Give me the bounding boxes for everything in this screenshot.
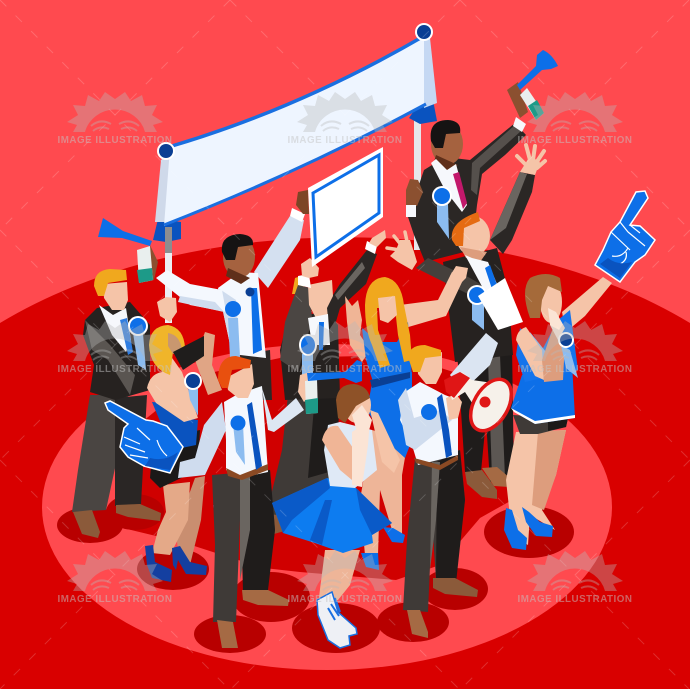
left sleeve	[280, 285, 312, 372]
left arm	[156, 270, 226, 312]
brown hair	[525, 274, 562, 318]
shirt	[224, 386, 268, 478]
heels	[145, 545, 172, 582]
hair	[409, 345, 441, 372]
inner hair skin	[168, 333, 182, 354]
person: girl in blue skirt with white boots	[272, 384, 400, 648]
banner	[153, 23, 437, 242]
left knob	[157, 142, 175, 160]
belt	[414, 455, 458, 470]
watermark labels: IMAGE ILLUSTRATION	[518, 364, 632, 375]
square sign	[308, 147, 383, 267]
raised hand	[520, 156, 540, 175]
head	[223, 236, 255, 278]
banner left side	[155, 150, 172, 222]
bodice	[516, 310, 578, 382]
arms	[322, 426, 353, 480]
black skirt	[150, 430, 200, 488]
ribbon	[228, 318, 240, 358]
person: blonde woman in blue dress	[345, 266, 468, 570]
watermark labels: IMAGE ILLUSTRATION	[518, 594, 632, 605]
watermark labels: IMAGE ILLUSTRATION	[518, 135, 632, 146]
blue dress	[152, 402, 198, 450]
watermark labels: IMAGE ILLUSTRATION	[288, 364, 402, 375]
back leg	[176, 476, 205, 565]
right leg	[115, 395, 147, 506]
hair	[149, 325, 185, 375]
watermarks	[58, 92, 632, 605]
trousers	[240, 350, 272, 400]
foam finger shade	[145, 452, 178, 470]
person: blond man with black suit	[72, 269, 161, 538]
phone	[173, 336, 204, 370]
shoes	[407, 610, 428, 638]
hands	[301, 258, 319, 278]
right arm	[400, 272, 463, 328]
person: cheerleader with foam hand	[504, 191, 655, 550]
blue horn	[517, 50, 558, 90]
person: blond man with megaphone	[398, 333, 520, 638]
megaphone bell	[462, 372, 520, 438]
megaphone body	[448, 372, 500, 425]
skirt shade	[272, 478, 330, 533]
left arm	[416, 258, 490, 295]
shoes	[217, 620, 238, 648]
shoes	[465, 470, 497, 499]
torso	[218, 272, 266, 358]
banner body	[164, 36, 424, 226]
shoe	[270, 514, 288, 534]
hand	[446, 394, 462, 420]
person: man with dark skin holding banner pole	[98, 190, 309, 400]
ribbon	[133, 333, 146, 370]
pants	[212, 470, 275, 622]
legs	[506, 430, 566, 545]
shorts	[513, 415, 568, 434]
head	[308, 280, 333, 318]
watermark labels: IMAGE ILLUSTRATION	[58, 364, 172, 375]
ribbon rosette	[437, 204, 449, 239]
ribbon	[561, 345, 578, 378]
hair	[222, 234, 253, 260]
cuffs	[298, 274, 311, 288]
hair	[431, 120, 460, 148]
banner bottom edge	[164, 104, 426, 225]
megaphone red collar	[444, 372, 470, 398]
shirt	[400, 382, 458, 465]
ribbon	[188, 388, 198, 416]
person: back man with pink tie holding horn	[406, 50, 558, 262]
paper	[478, 278, 523, 330]
hand to mouth	[548, 308, 565, 340]
raised arm	[562, 277, 612, 332]
jacket	[443, 248, 513, 362]
group shadow	[123, 355, 512, 580]
head	[343, 387, 371, 423]
watermark labels	[58, 135, 632, 605]
watermark labels: IMAGE ILLUSTRATION	[288, 594, 402, 605]
red hair	[218, 356, 251, 388]
hair	[94, 269, 127, 296]
blonde hair	[365, 277, 412, 368]
ribbon	[233, 424, 245, 465]
shirt and tie	[465, 255, 497, 292]
light floor ellipse	[42, 344, 612, 670]
collar and shirt	[99, 305, 131, 352]
hand and spray can	[298, 372, 312, 402]
sleeve to megaphone	[450, 333, 498, 392]
can hand	[143, 245, 158, 282]
pole hand	[157, 297, 177, 322]
left banner pole	[165, 227, 172, 253]
left blue tab	[153, 219, 181, 242]
heels	[504, 508, 527, 550]
head	[226, 364, 254, 398]
right arm with raised hand	[195, 332, 222, 395]
person: woman with phone	[145, 325, 222, 582]
sleeve across chest	[398, 388, 452, 450]
hands at mouth	[352, 405, 372, 435]
trousers	[268, 395, 338, 530]
pink tie	[453, 172, 467, 209]
person: red-haired man with foam finger	[105, 356, 362, 648]
belt	[370, 372, 410, 388]
left hand	[390, 240, 417, 270]
foam hand	[595, 191, 655, 282]
raised sleeve	[490, 172, 535, 254]
hair tuft	[292, 275, 304, 294]
skirt	[511, 363, 575, 424]
shirt and tie	[308, 314, 330, 345]
head	[540, 281, 562, 323]
legs	[318, 550, 360, 605]
banner top edge	[172, 36, 424, 146]
dark red floor disc	[0, 237, 690, 689]
tie	[247, 402, 262, 470]
right banner pole	[414, 110, 421, 250]
foam hand shade	[600, 258, 632, 278]
right knob	[415, 23, 433, 41]
foam finger	[105, 401, 183, 473]
banner right side	[418, 38, 437, 108]
person: orange hair man waving	[387, 145, 545, 499]
head	[431, 123, 463, 165]
left arm and hand	[345, 296, 370, 362]
right shoe	[116, 504, 161, 521]
white top	[324, 422, 377, 488]
left shoe	[73, 510, 100, 538]
legs	[360, 430, 408, 555]
spray can	[520, 88, 544, 120]
trousers	[457, 345, 514, 482]
head	[417, 352, 442, 384]
foot shadows	[57, 494, 574, 653]
watermark labels: IMAGE ILLUSTRATION	[288, 135, 402, 146]
orange hair	[452, 212, 480, 246]
spray can	[137, 246, 153, 283]
raised sleeve highlight	[471, 125, 521, 195]
dress top	[362, 322, 412, 388]
watermark suns	[67, 92, 623, 591]
skirt	[272, 478, 392, 553]
left hand on pole	[406, 179, 423, 206]
left shoulder and arm	[516, 327, 544, 380]
brown hair	[336, 384, 370, 423]
blue horn	[307, 360, 362, 383]
pink accent	[213, 505, 220, 525]
jacket	[83, 302, 150, 400]
right blue tab	[409, 100, 437, 124]
watermark labels: IMAGE ILLUSTRATION	[58, 594, 172, 605]
ribbon	[472, 300, 484, 330]
person: man holding up square sign	[213, 147, 386, 534]
right hand	[296, 190, 309, 214]
raised cuff and hand	[513, 117, 526, 132]
shoes	[383, 527, 405, 543]
ribbon	[302, 354, 313, 378]
left leg	[72, 395, 128, 512]
dress skirt	[367, 372, 412, 458]
face	[378, 296, 397, 323]
tie	[251, 288, 262, 354]
front leg	[152, 482, 190, 555]
jacket highlight	[85, 320, 135, 395]
watermark labels: IMAGE ILLUSTRATION	[58, 135, 172, 146]
raised right arm	[254, 216, 304, 288]
jacket	[408, 123, 526, 262]
belt	[226, 464, 268, 480]
tie	[437, 394, 452, 458]
head	[456, 216, 490, 256]
pants	[403, 450, 465, 612]
left arm	[178, 402, 226, 478]
jacket	[280, 310, 340, 400]
head	[103, 282, 128, 310]
left horn	[98, 218, 152, 246]
back	[147, 355, 198, 422]
right sleeve	[322, 250, 377, 325]
white boots	[317, 592, 357, 648]
shirt	[431, 159, 467, 212]
right arm	[262, 388, 304, 432]
ribbon	[421, 404, 437, 420]
